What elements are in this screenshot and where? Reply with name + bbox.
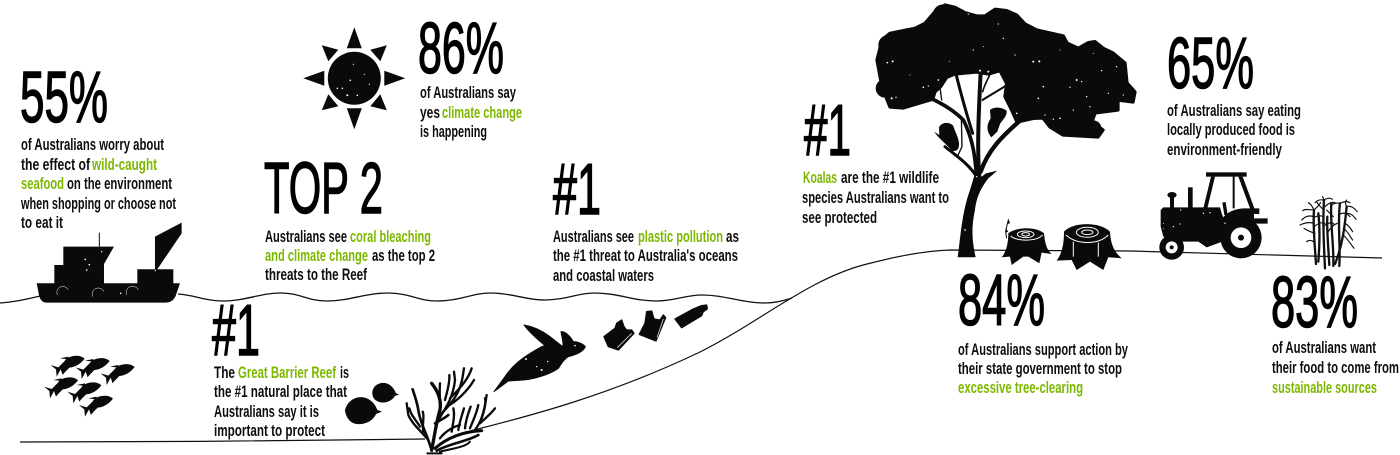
stat: 55% seafood: the effect of — [21, 155, 90, 174]
koala: left — [934, 123, 959, 151]
stat: 86% climate change: yes — [420, 103, 440, 122]
stat: #1 Great Barrier Reef: important to protect — [214, 421, 325, 440]
stat: 55% seafood: when shopping or choose not — [20, 194, 176, 213]
icon: school of tuna — [44, 356, 135, 417]
stat: 55% seafood: 55% — [20, 58, 108, 138]
stat: 84% tree-clearing: their state government to stop — [958, 359, 1122, 378]
icon: plastic bags and bottle — [604, 305, 707, 350]
stat: #1 koalas: are the #1 wildlife — [841, 168, 939, 187]
stat: 65% local food — [1167, 24, 1301, 159]
stat: #1 koalas — [802, 91, 949, 227]
stat: #1 Great Barrier Reef: Great Barrier Reef — [238, 363, 336, 382]
stat: #1 koalas: #1 — [804, 91, 851, 171]
stat: #1 Great Barrier Reef: is — [340, 363, 349, 382]
icon: tree stumps — [1002, 218, 1122, 270]
stat: #1 Great Barrier Reef: #1 — [212, 291, 260, 371]
seabed and land ground line — [20, 250, 1382, 442]
stat: #1 plastic pollution: Australians see — [553, 227, 634, 246]
icon: sun — [303, 27, 405, 129]
stat: #1 koalas: species Australians want to — [802, 188, 949, 207]
stat: top 2 threats to the Reef: and climate change — [265, 246, 368, 265]
stat: 86% climate change — [418, 9, 522, 141]
stat: 55% seafood: seafood — [21, 174, 64, 193]
icon: sugar cane — [1300, 197, 1357, 268]
icon: sea turtle — [494, 325, 585, 392]
stat: 84% tree-clearing — [958, 261, 1128, 397]
stat: 84% tree-clearing: 84% — [958, 261, 1045, 341]
stat: 55% seafood — [20, 58, 176, 232]
stat: 86% climate change: of Australians say — [420, 83, 516, 102]
icon: reef fish and coral — [345, 368, 495, 453]
stat: #1 plastic pollution: as — [726, 227, 739, 246]
stat: 65% local food: of Australians say eating — [1167, 101, 1301, 120]
stat: top 2 threats to the Reef: as the top 2 — [372, 246, 435, 265]
stat: 65% local food: environment-friendly — [1167, 140, 1282, 159]
stat: #1 plastic pollution — [553, 150, 739, 285]
stat: 84% tree-clearing: of Australians support action by — [958, 340, 1128, 359]
stat: 86% climate change: climate change — [442, 103, 522, 122]
stat: #1 Great Barrier Reef — [212, 291, 349, 440]
stat: top 2 threats to the Reef: Australians see — [265, 227, 347, 246]
stat: 86% climate change: is happening — [420, 122, 487, 141]
stat: 65% local food: locally produced food is — [1167, 120, 1295, 139]
stat: 55% seafood: to eat it — [21, 213, 63, 232]
stat: #1 Great Barrier Reef: The — [214, 363, 235, 382]
icon: fishing boat — [37, 223, 182, 303]
stat: #1 plastic pollution: the #1 threat to Australia's oceans — [553, 246, 738, 265]
stat: #1 Great Barrier Reef: the #1 natural place that — [214, 382, 347, 401]
stat: top 2 threats to the Reef — [264, 149, 435, 284]
icon: gum tree with koalas — [876, 4, 1135, 257]
stat: #1 koalas: see protected — [802, 208, 877, 227]
water surface wave line — [0, 293, 792, 303]
stat: #1 plastic pollution: and coastal waters — [553, 266, 654, 285]
icon: tractor — [1159, 172, 1268, 260]
stat: #1 koalas: Koalas — [803, 168, 837, 187]
stat: #1 plastic pollution: plastic pollution — [638, 227, 723, 246]
stat: #1 plastic pollution: #1 — [553, 150, 601, 230]
stat: top 2 threats to the Reef: threats to the Reef — [265, 265, 367, 284]
stat: 55% seafood: wild-caught — [91, 155, 157, 174]
stat: 83% sustainable food — [1271, 263, 1399, 397]
stat: 65% local food: 65% — [1167, 24, 1254, 104]
stat: 55% seafood: on the environment — [67, 174, 172, 193]
stat: 55% seafood: of Australians worry about — [21, 135, 164, 154]
stat: 84% tree-clearing: excessive tree-clearing — [958, 378, 1083, 397]
stat: top 2 threats to the Reef: TOP 2 — [264, 149, 383, 229]
stat: 86% climate change: 86% — [418, 9, 504, 89]
stat: top 2 threats to the Reef: coral bleaching — [350, 227, 431, 246]
koala: right — [987, 108, 1007, 137]
stat: #1 Great Barrier Reef: Australians say it is — [214, 402, 319, 421]
